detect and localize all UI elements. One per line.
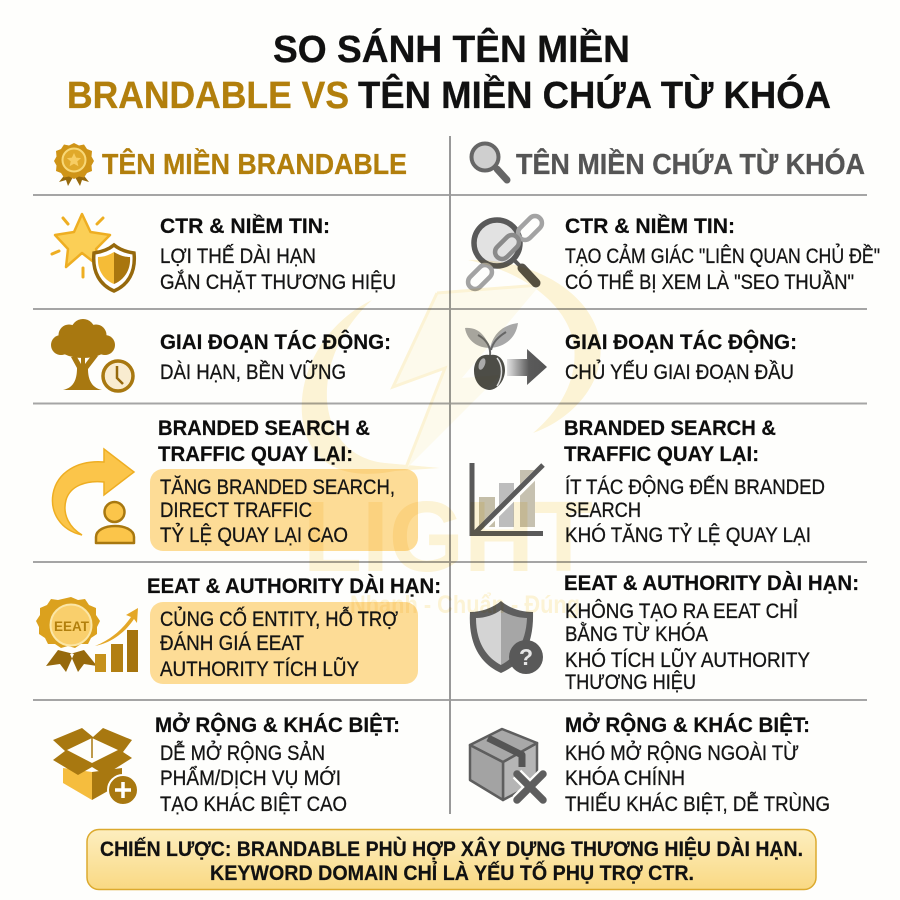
highlight box: EEAT xyxy=(150,602,418,684)
heading: keyword: TÊN MIỀN CHỨA TỪ KHÓA xyxy=(516,149,865,181)
icon: magnifier xyxy=(472,144,507,180)
icon: shield with question mark xyxy=(470,601,543,674)
panel: keyword column xyxy=(465,144,880,816)
row 3 text: BRANDED SEARCH & xyxy=(564,416,776,440)
row 2 text: GIAI ĐOẠN TÁC ĐỘNG: xyxy=(160,329,391,354)
highlight box: branded search: TỶ LỆ QUAY LẠI CAO xyxy=(160,522,348,547)
row 5 text: THIẾU KHÁC BIỆT, DỄ TRÙNG xyxy=(565,790,830,816)
row 4 text: BẰNG TỪ KHÓA xyxy=(565,621,709,646)
row 1 text: CTR & NIỀM TIN: xyxy=(160,213,330,238)
callout: strategy: CHIẾN LƯỢC: BRANDABLE PHÙ HỢP XÂY DỰNG THƯƠNG HIỆU DÀI HẠN. xyxy=(100,837,803,861)
row 2 text xyxy=(565,329,797,384)
title: BRANDABLE VS xyxy=(67,75,349,117)
row 5 text: MỞ RỘNG & KHÁC BIỆT: xyxy=(565,712,810,737)
highlight box: branded search: TĂNG BRANDED SEARCH, xyxy=(160,474,395,499)
icon: medal xyxy=(54,143,94,186)
row 3 heading: TRAFFIC QUAY LẠI: xyxy=(158,442,353,466)
icon: EEAT badge with growth bars: EEAT xyxy=(54,619,90,634)
heading: brandable: TÊN MIỀN BRANDABLE xyxy=(102,149,407,181)
row 3 heading xyxy=(158,416,370,466)
row 2 text xyxy=(160,329,391,384)
row 4 text: THƯƠNG HIỆU xyxy=(565,669,696,694)
row 5 text: PHẨM/DỊCH VỤ MỚI xyxy=(160,765,341,790)
row 5 text xyxy=(565,712,830,816)
icon: tree with clock xyxy=(51,319,133,391)
row 5 text xyxy=(155,712,400,816)
row 4 text xyxy=(564,570,859,694)
row 1 text: GẮN CHẶT THƯƠNG HIỆU xyxy=(160,269,396,294)
panel: brandable column xyxy=(36,143,441,816)
row 5 text: MỞ RỘNG & KHÁC BIỆT: xyxy=(155,712,400,737)
row 3 text: ÍT TÁC ĐỘNG ĐẾN BRANDED xyxy=(565,474,825,499)
row 3 text xyxy=(564,416,825,547)
row 4 text: EEAT & AUTHORITY DÀI HẠN: xyxy=(564,570,859,595)
title xyxy=(67,27,831,117)
highlight box: EEAT: AUTHORITY TÍCH LŨY xyxy=(160,656,359,681)
watermark: LIGHT logo: LIGHT xyxy=(303,481,593,593)
watermark: LIGHT logo: Nhanh - Chuẩn - Đúng xyxy=(350,591,580,619)
row 2 text: DÀI HẠN, BỀN VỮNG xyxy=(160,359,346,384)
row 4 heading: EEAT & AUTHORITY DÀI HẠN: xyxy=(147,573,441,598)
row 1 text xyxy=(565,213,880,294)
row 5 text: KHÓA CHÍNH xyxy=(565,765,685,790)
highlight box: branded search: DIRECT TRAFFIC xyxy=(160,498,312,522)
row 1 text: LỢI THẾ DÀI HẠN xyxy=(160,243,316,268)
row 4 text: KHÓ TÍCH LŨY AUTHORITY xyxy=(565,647,810,672)
row 1 text xyxy=(160,213,396,294)
row 2 text: GIAI ĐOẠN TÁC ĐỘNG: xyxy=(565,329,797,354)
row 3 text: SEARCH xyxy=(565,498,641,522)
watermark: LIGHT logo xyxy=(302,260,601,619)
row 5 text: DỄ MỞ RỘNG SẢN xyxy=(160,739,325,765)
row 1 text: CÓ THỂ BỊ XEM LÀ "SEO THUẦN" xyxy=(565,269,854,294)
icon: magnifier and chain xyxy=(465,213,545,292)
row 3 heading: BRANDED SEARCH & xyxy=(158,416,370,440)
icon: closed box with cross xyxy=(470,729,543,800)
row 4 text: KHÔNG TẠO RA EEAT CHỈ xyxy=(565,598,798,623)
icon: open box with plus xyxy=(53,728,138,805)
icon: shield with question mark: ? xyxy=(519,644,533,670)
icon: flat chart xyxy=(472,463,543,536)
row 3 text: KHÓ TĂNG TỶ LỆ QUAY LẠI xyxy=(565,522,811,547)
icon: EEAT badge with growth bars xyxy=(36,597,138,672)
title: TÊN MIỀN CHỨA TỪ KHÓA xyxy=(358,73,831,117)
row 1 text: CTR & NIỀM TIN: xyxy=(565,213,735,238)
row 3 text: TRAFFIC QUAY LẠI: xyxy=(564,442,759,466)
callout: strategy xyxy=(87,830,816,890)
row 5 text: TẠO KHÁC BIỆT CAO xyxy=(160,791,347,816)
icon: star and shield xyxy=(52,214,134,291)
icon: sprout with arrow xyxy=(465,323,547,390)
row 5 text: KHÓ MỞ RỘNG NGOÀI TỪ xyxy=(565,740,799,765)
highlight box: EEAT: ĐÁNH GIÁ EEAT xyxy=(160,630,304,655)
title: SO SÁNH TÊN MIỀN xyxy=(273,27,630,71)
icon: return arrow and user xyxy=(52,449,134,543)
highlight box: branded search xyxy=(150,469,418,551)
row 2 text: CHỦ YẾU GIAI ĐOẠN ĐẦU xyxy=(565,359,794,384)
callout: strategy: KEYWORD DOMAIN CHỈ LÀ YẾU TỐ PHỤ TRỢ CTR. xyxy=(210,861,694,885)
highlight box: EEAT: CỦNG CỐ ENTITY, HỖ TRỢ xyxy=(160,605,398,631)
